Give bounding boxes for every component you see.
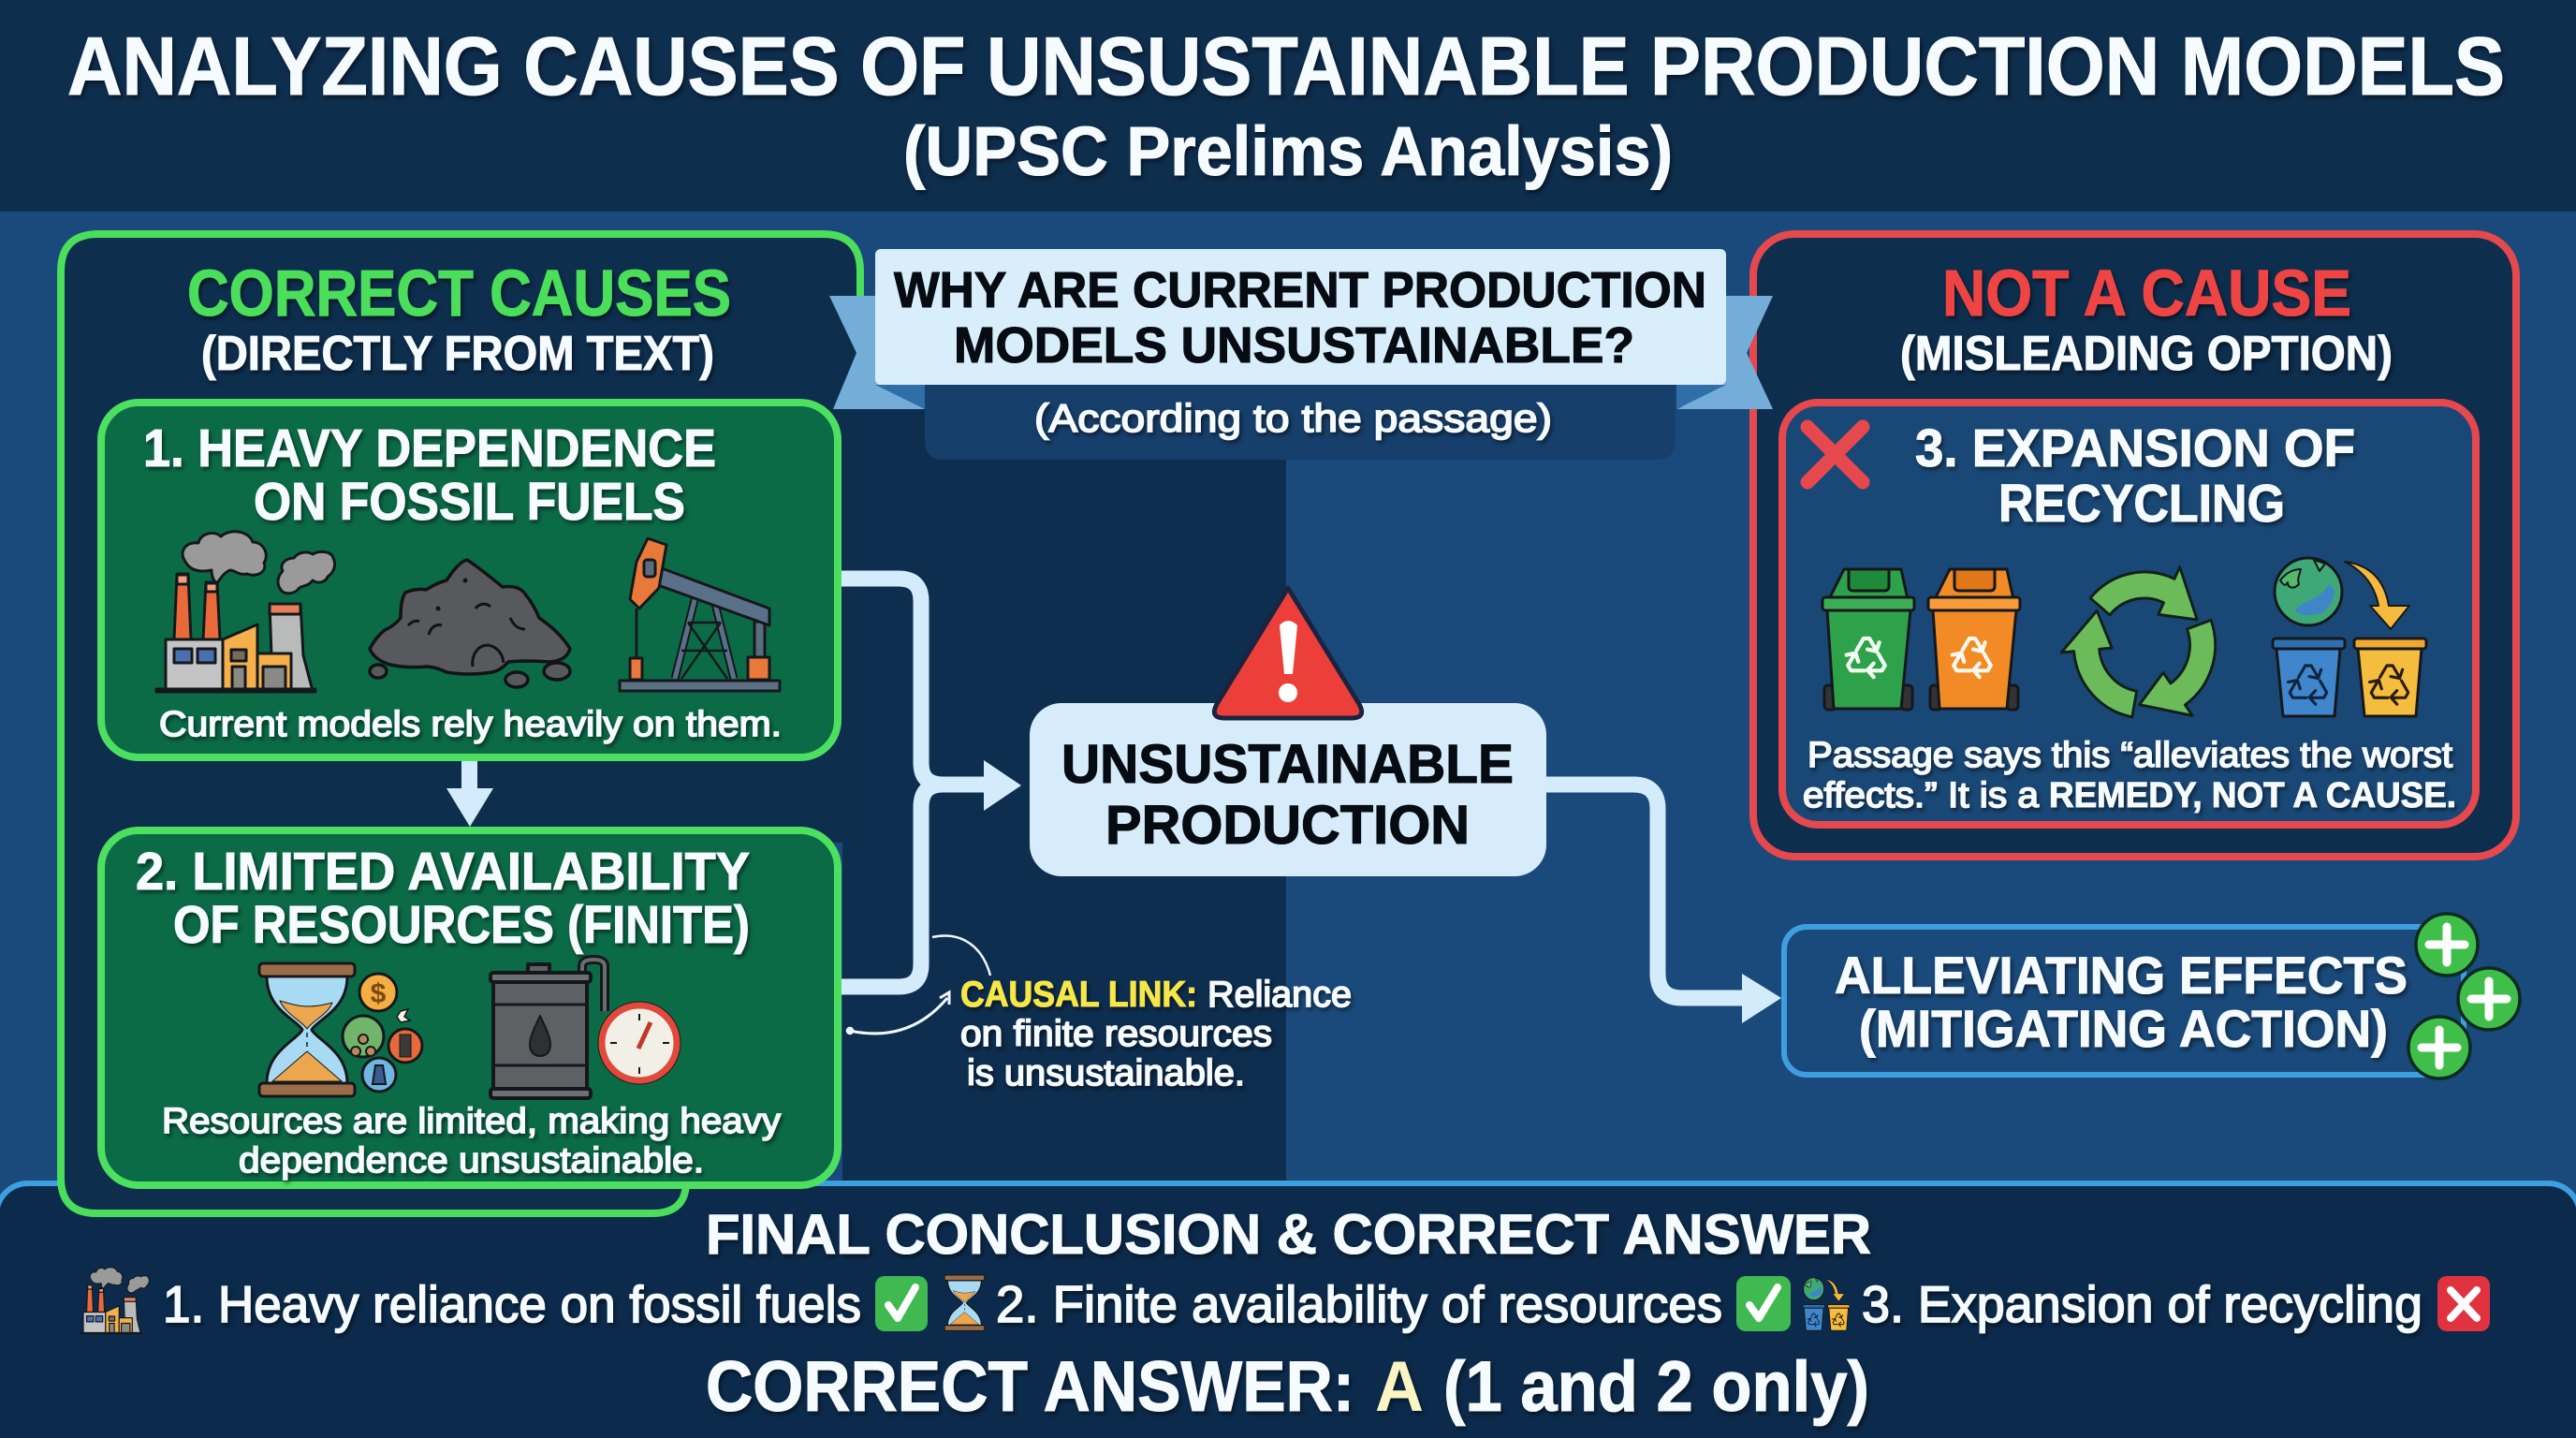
card 3 caption: REMEDY, NOT A CAUSE. — [2049, 776, 2456, 815]
card 3 caption: effects.” It is a — [1803, 776, 2040, 815]
panel: alleviating effects — [1784, 914, 2520, 1078]
node: unsustainable production — [1030, 703, 1546, 876]
ribbon tail right — [1677, 296, 1773, 409]
card 2 caption: Resources are limited, making heavy — [162, 1102, 781, 1141]
subheading: misleading option: (MISLEADING OPTION) — [1900, 327, 2393, 381]
card 2 heading — [136, 842, 750, 955]
arrow: production to alleviating effects — [1535, 785, 1781, 1023]
card 3 heading: 3. EXPANSION OF — [1915, 418, 2355, 478]
icon: coal pile — [370, 560, 570, 687]
according to the passage: (According to the passage) — [1034, 396, 1552, 440]
icon: warning triangle — [1214, 588, 1362, 718]
card 3 caption — [1803, 736, 2456, 815]
callout text: is unsustainable. — [967, 1053, 1245, 1093]
icon: red cross — [1808, 427, 1863, 482]
caption backing — [925, 379, 1676, 460]
card 1 heading: 1. HEAVY DEPENDENCE — [143, 418, 716, 478]
callout text — [960, 975, 1352, 1093]
heading: correct causes: CORRECT CAUSES — [187, 257, 731, 330]
icon: recycle arrows — [2053, 567, 2237, 732]
node text — [1061, 734, 1514, 856]
card 2 heading: OF RESOURCES (FINITE) — [173, 895, 750, 955]
callout pointer lines — [847, 935, 990, 1034]
ribbon main — [875, 249, 1726, 385]
icon: oil barrel and gauge — [490, 960, 680, 1098]
card 3 heading — [1915, 418, 2355, 534]
icon: oil pump — [620, 538, 780, 691]
subtitle: (UPSC Prelims Analysis) — [903, 112, 1673, 190]
subheading: directly from text: (DIRECTLY FROM TEXT) — [201, 327, 714, 381]
callout text: on finite resources — [960, 1014, 1272, 1054]
card 1 heading — [143, 418, 716, 532]
ribbon question text: WHY ARE CURRENT PRODUCTION — [894, 262, 1706, 318]
panel: correct causes — [61, 234, 860, 1213]
icon: plus badge 1 — [2416, 914, 2478, 976]
arrow: card 1 to card 2 — [446, 761, 493, 827]
correct answer line: CORRECT ANSWER: — [706, 1347, 1354, 1427]
node text: UNSUSTAINABLE — [1061, 734, 1514, 795]
icon: orange wheelie bin — [1928, 569, 2020, 710]
icon: globe and sorting bins — [2273, 558, 2426, 716]
card 2: limited resources — [101, 830, 838, 1185]
correct answer line: (1 and 2 only) — [1443, 1347, 1869, 1427]
correct answer line — [706, 1347, 1869, 1427]
card 1: fossil fuels — [101, 403, 838, 757]
arrows: causes into unsustainable production — [842, 579, 1021, 987]
dark left backdrop — [842, 409, 1286, 1186]
card 3 caption: Passage says this “alleviates the worst — [1808, 736, 2452, 775]
alleviating text: (MITIGATING ACTION) — [1859, 999, 2388, 1058]
card 1 caption: Current models rely heavily on them. — [159, 705, 782, 744]
statement 1: 1. Heavy reliance on fossil fuels — [163, 1275, 861, 1333]
icon: green check 2 — [1736, 1276, 1791, 1331]
card 2 caption: dependence unsustainable. — [239, 1141, 704, 1181]
card 3 heading: RECYCLING — [1998, 474, 2285, 534]
node text: PRODUCTION — [1105, 795, 1470, 856]
conclusion heading: FINAL CONCLUSION & CORRECT ANSWER — [706, 1203, 1871, 1266]
panel: question ribbon — [829, 249, 1773, 460]
callout text: CAUSAL LINK: — [960, 975, 1197, 1015]
ribbon question text: MODELS UNSUSTAINABLE? — [954, 317, 1634, 374]
ribbon folds — [875, 385, 1726, 409]
alleviating text — [1835, 946, 2408, 1058]
icon: resource coins — [343, 974, 422, 1092]
icon: mini recycling bins — [1803, 1278, 1850, 1330]
icon: red cross — [2437, 1276, 2490, 1331]
card 1 heading: ON FOSSIL FUELS — [254, 472, 685, 532]
ribbon question text — [894, 262, 1706, 374]
panel: final conclusion — [0, 1183, 2576, 1438]
icon: factory — [156, 532, 335, 692]
callout text: Reliance — [1208, 975, 1352, 1015]
icon: hourglass — [259, 963, 355, 1096]
correct answer line: A — [1375, 1347, 1424, 1427]
card 3: recycling — [1782, 403, 2476, 825]
header band — [0, 0, 2576, 212]
icon: resource coins: $ — [371, 978, 387, 1009]
statement 3: 3. Expansion of recycling — [1862, 1275, 2422, 1333]
callout: causal link — [847, 935, 1352, 1093]
statement 2: 2. Finite availability of resources — [996, 1275, 1722, 1333]
heading: not a cause: NOT A CAUSE — [1942, 257, 2351, 330]
icon: plus badge 3 — [2408, 1017, 2470, 1078]
panel: not a cause — [1753, 234, 2516, 857]
ribbon tail left — [829, 296, 925, 409]
alleviating text: ALLEVIATING EFFECTS — [1835, 946, 2408, 1005]
icon: green check 1 — [875, 1276, 928, 1331]
icon: plus badge 2 — [2458, 968, 2520, 1030]
card 2 caption — [162, 1102, 781, 1181]
icon: mini hourglass — [944, 1275, 985, 1330]
card 2 heading: 2. LIMITED AVAILABILITY — [136, 842, 750, 902]
icon: green wheelie bin — [1822, 569, 1914, 710]
icon: mini factory — [80, 1268, 149, 1334]
